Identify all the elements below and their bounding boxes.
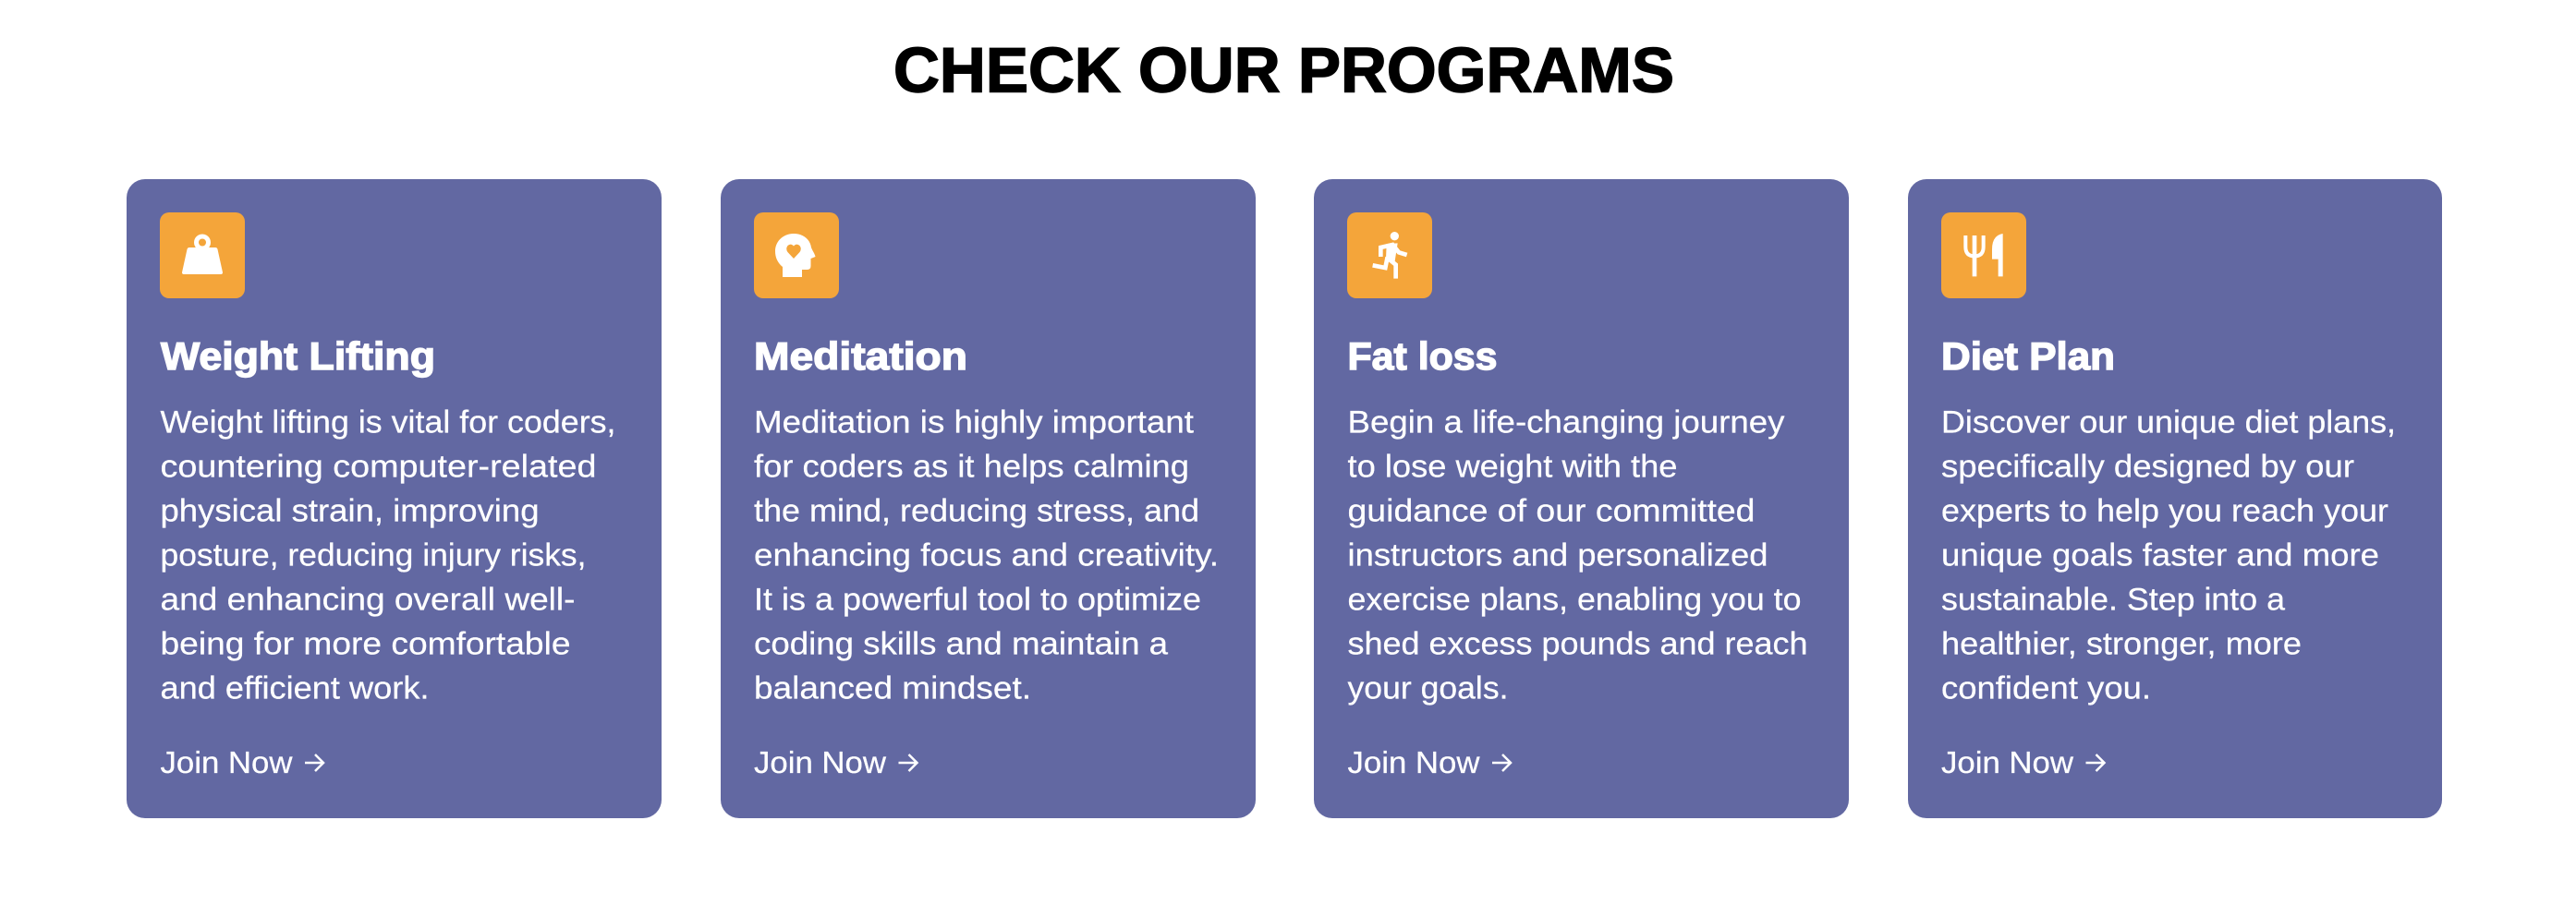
- heading: Diet Plan: [1941, 334, 2115, 378]
- description: the mind, reducing stress, and: [754, 493, 1199, 528]
- description: countering computer-related: [161, 449, 597, 484]
- description: guidance of our committed: [1347, 493, 1756, 528]
- description: for coders as it helps calming: [754, 449, 1189, 484]
- heading: Meditation: [754, 334, 967, 378]
- description: being for more comfortable: [161, 626, 571, 661]
- description: instructors and personalized: [1347, 537, 1768, 573]
- description: to lose weight with the: [1347, 449, 1678, 484]
- description: confident you.: [1941, 670, 2151, 706]
- heading: Fat loss: [1347, 334, 1497, 378]
- panel: Diet Plan: [1908, 179, 2442, 818]
- description: posture, reducing injury risks,: [161, 537, 586, 573]
- description: and efficient work.: [161, 670, 429, 706]
- description: experts to help you reach your: [1941, 493, 2388, 528]
- description: shed excess pounds and reach: [1347, 626, 1807, 661]
- panel: Weight Lifting: [127, 179, 662, 818]
- description: sustainable. Step into a: [1941, 582, 2285, 617]
- description: [1347, 404, 1807, 706]
- card background: [1908, 179, 2442, 818]
- card background: [1314, 179, 1849, 818]
- description: coding skills and maintain a: [754, 626, 1168, 661]
- panel: Meditation: [721, 179, 1256, 818]
- icon: head with heart: [754, 212, 839, 298]
- link: Join Now: Join Now: [1347, 745, 1480, 779]
- heading: Weight Lifting: [161, 334, 435, 378]
- icon: weight: [160, 212, 245, 298]
- description: unique goals faster and more: [1941, 537, 2379, 573]
- description: enhancing focus and creativity.: [754, 537, 1219, 573]
- description: [754, 404, 1219, 706]
- description: exercise plans, enabling you to: [1347, 582, 1802, 617]
- link: Join Now: Join Now: [161, 745, 293, 779]
- icon: fork and knife: [1941, 212, 2026, 298]
- icon: running person: [1347, 212, 1432, 298]
- card background: [721, 179, 1256, 818]
- description: It is a powerful tool to optimize: [754, 582, 1201, 617]
- link: Join Now: Join Now: [1941, 745, 2073, 779]
- description: your goals.: [1347, 670, 1508, 706]
- title: CHECK OUR PROGRAMS: [893, 35, 1674, 105]
- description: Begin a life-changing journey: [1347, 404, 1785, 440]
- link: Join Now: Join Now: [754, 745, 886, 779]
- description: balanced mindset.: [754, 670, 1031, 706]
- description: Discover our unique diet plans,: [1941, 404, 2396, 440]
- description: [161, 404, 615, 706]
- description: healthier, stronger, more: [1941, 626, 2302, 661]
- description: physical strain, improving: [161, 493, 539, 528]
- description: Weight lifting is vital for coders,: [161, 404, 615, 440]
- description: Meditation is highly important: [754, 404, 1195, 440]
- description: [1941, 404, 2396, 706]
- description: and enhancing overall well-: [161, 582, 575, 617]
- description: specifically designed by our: [1941, 449, 2354, 484]
- card background: [127, 179, 662, 818]
- panel: Fat loss: [1314, 179, 1849, 818]
